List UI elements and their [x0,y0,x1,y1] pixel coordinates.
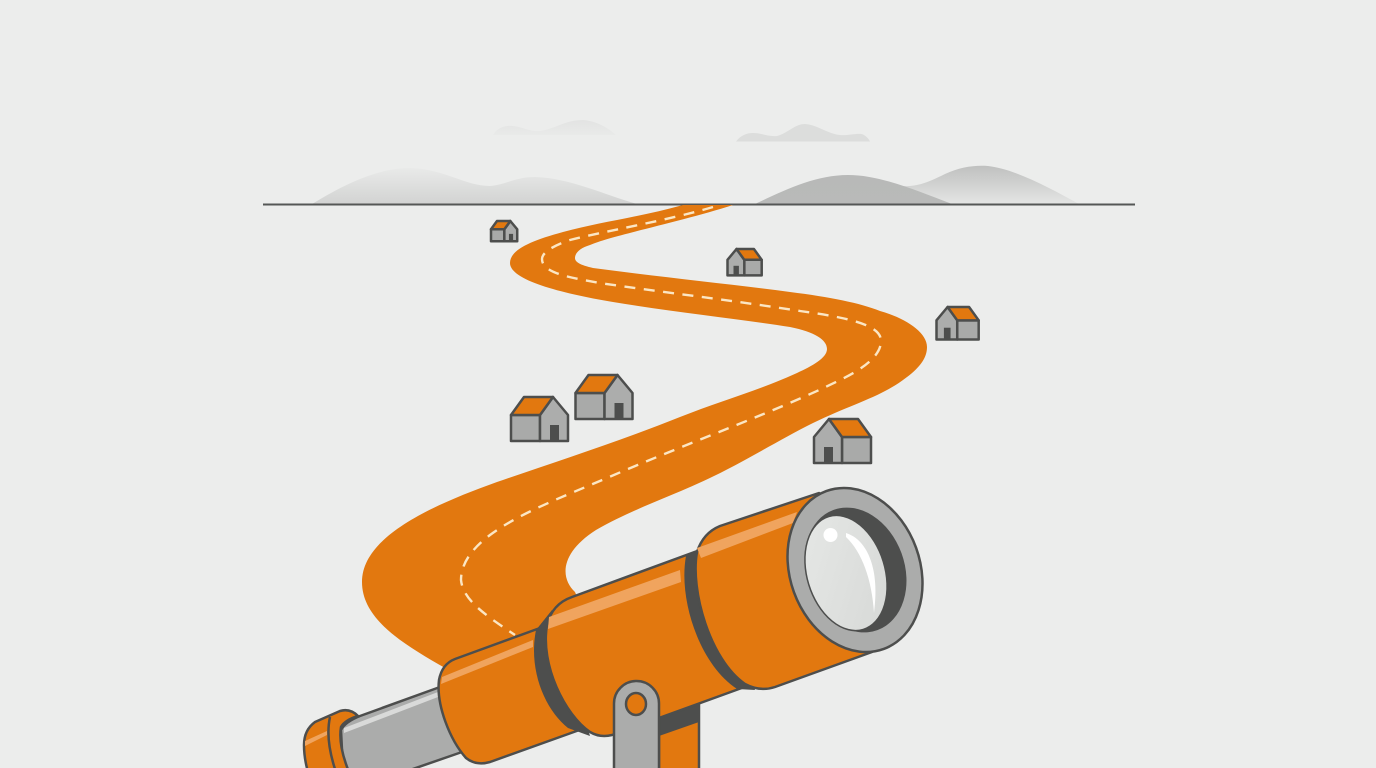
left mountain range [312,168,637,204]
house: right of road [936,307,979,340]
house: below road right [814,419,871,463]
front band [684,548,755,690]
road centre dashes [461,207,881,635]
house: far left small [491,221,517,241]
telescope [304,469,945,768]
front rim [765,469,945,671]
far right mountain [900,166,1079,204]
mountains [312,166,1079,204]
middle tube section [546,550,750,736]
house: upper centre small [728,249,762,275]
near right mountain [755,175,952,204]
houses [491,221,979,463]
road surface [362,205,927,668]
mount bracket [614,681,659,768]
stand post [659,695,699,768]
house: centre left upper [576,375,632,419]
eyepiece cap [304,710,358,768]
left cloud [493,120,616,135]
lens glass [791,505,901,641]
right cloud [736,124,870,142]
rear tube section [439,628,585,763]
house: centre left lower [511,397,568,441]
front tube section [696,493,872,689]
rear band [534,610,590,736]
winding road [362,205,927,668]
horizon line [263,204,1135,206]
eyepiece tube [341,687,462,768]
lens housing [788,493,923,647]
clouds [493,120,870,142]
